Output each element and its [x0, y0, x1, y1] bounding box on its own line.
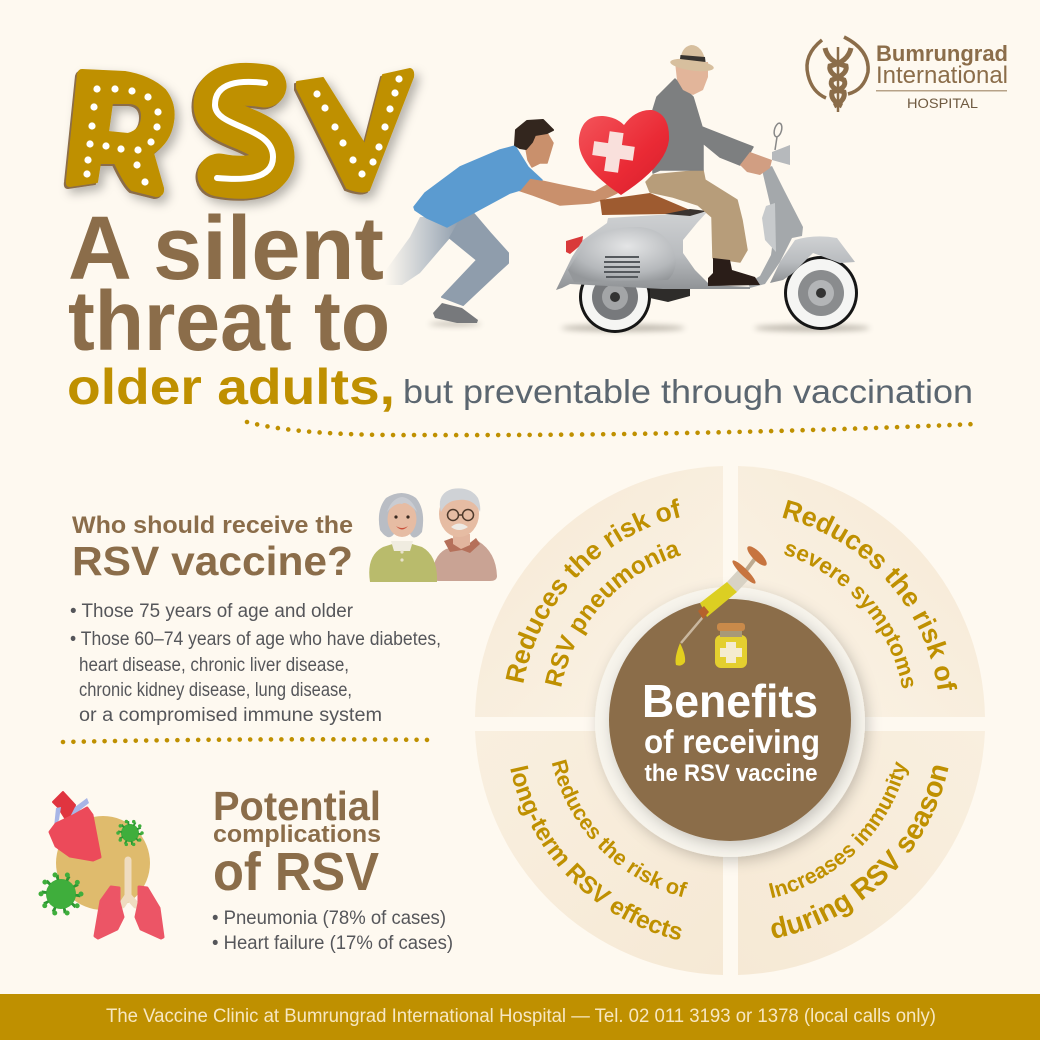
icon: vaccine bottle [715, 623, 747, 668]
eligibility list: heart disease, chronic liver disease, [79, 655, 349, 676]
heading: A silent threat to older adults: A silent [68, 199, 384, 299]
center ring [595, 587, 865, 857]
logo: Bumrungrad International Hospital [807, 37, 1008, 112]
icon: heart, viruses and lungs [41, 792, 163, 938]
left lung [95, 887, 123, 938]
heading: A silent threat to older adults: threat to [68, 274, 390, 368]
eligibility list: • Those 75 years of age and older [70, 601, 354, 622]
quadrant: reduces risk of severe symptoms [738, 466, 985, 717]
heading: Who should receive the [72, 512, 353, 539]
engine underside [650, 287, 690, 302]
quadrant: reduces risk of severe symptoms: Reduces the risk of [782, 500, 958, 690]
quadrant: reduces risk of severe symptoms: severe symptoms [784, 544, 914, 688]
front fender [770, 236, 855, 283]
heading: A silent threat to older adults [67, 199, 973, 415]
complications list: • Heart failure (17% of cases) [212, 933, 453, 954]
scooter [556, 122, 858, 333]
letter S [213, 82, 273, 179]
dotted divider: top [247, 422, 975, 435]
center title [642, 675, 820, 787]
title: RSV decorated letters [65, 69, 413, 198]
scooter body [556, 212, 750, 290]
elderly rider [646, 45, 772, 286]
center title: Benefits [642, 675, 818, 727]
quadrant: reduces risk of long-term RSV effects: long-term RSV effects [510, 766, 682, 940]
icon: syringe [676, 544, 769, 666]
footer bar: The Vaccine Clinic at Bumrungrad International Hospital — Tel. 02 011 3193 or 1378 (local calls only) [106, 1006, 936, 1027]
section: who should receive the RSV vaccine [70, 488, 497, 726]
quadrant: reduces risk of RSV pneumonia: Reduces the risk of [506, 498, 680, 683]
heading: Potential [213, 783, 381, 829]
quadrant: reduces risk of long-term RSV effects: Reduces the risk of [552, 760, 688, 897]
logo wordmark: Bumrungrad [876, 41, 1008, 66]
rear cowl highlight [568, 227, 676, 282]
letter V [295, 69, 413, 194]
mirror and headlight [772, 145, 790, 165]
heading [72, 512, 353, 584]
center disc [609, 599, 851, 841]
heading: of RSV [213, 842, 379, 902]
section: potential complications of RSV [41, 783, 453, 954]
tail light [566, 236, 583, 254]
rear wheel [579, 261, 651, 333]
heart with medical cross [579, 110, 669, 195]
virus large [41, 874, 81, 914]
eligibility list [70, 601, 441, 726]
center title: the RSV vaccine [644, 760, 818, 787]
heading [213, 783, 381, 902]
right lung [136, 887, 163, 938]
quadrant: increases immunity during RSV season: Increases immunity [768, 761, 910, 898]
complications list: • Pneumonia (78% of cases) [212, 908, 446, 929]
heading: A silent threat to older adults: but preventable through vaccination [403, 373, 973, 410]
front wheel [784, 256, 858, 330]
eligibility list: chronic kidney disease, lung disease, [79, 680, 352, 701]
quadrant: increases immunity during RSV season [738, 731, 985, 975]
heading: complications [213, 821, 381, 848]
fork and handle neck [748, 166, 803, 288]
illustration: man pushing scooter with elderly rider and heart [380, 45, 870, 333]
heading: A silent threat to older adults: older adults, [67, 359, 395, 415]
quadrant: reduces risk of RSV pneumonia [475, 466, 723, 717]
engine vents [604, 256, 640, 278]
logo emblem [807, 37, 868, 112]
chart: benefits wheel [475, 466, 985, 975]
pushing man [380, 120, 617, 323]
trachea [122, 860, 136, 905]
letter R [65, 70, 174, 198]
heart organ [50, 792, 100, 860]
ground shadows [429, 322, 870, 332]
center title: of receiving [644, 723, 820, 760]
logo: Bumrungrad International Hospital: HOSPITAL [907, 95, 978, 111]
quadrant: increases immunity during RSV season: during RSV season [771, 766, 948, 938]
saddle [600, 193, 690, 215]
virus small [118, 821, 142, 845]
quadrant: reduces risk of RSV pneumonia: RSV pneumonia [544, 544, 682, 687]
footer bar [0, 994, 1040, 1040]
logo: Bumrungrad International Hospital: International [876, 62, 1008, 89]
dotted divider: middle [63, 739, 437, 742]
eligibility list: • Those 60–74 years of age who have diabetes, [70, 629, 441, 650]
leg panel [762, 203, 776, 252]
quadrant: reduces risk of long-term RSV effects [475, 731, 723, 975]
complications list [212, 908, 453, 954]
icon: elderly couple [369, 488, 497, 582]
heading: RSV vaccine? [72, 538, 353, 584]
eligibility list: or a compromised immune system [79, 705, 382, 726]
